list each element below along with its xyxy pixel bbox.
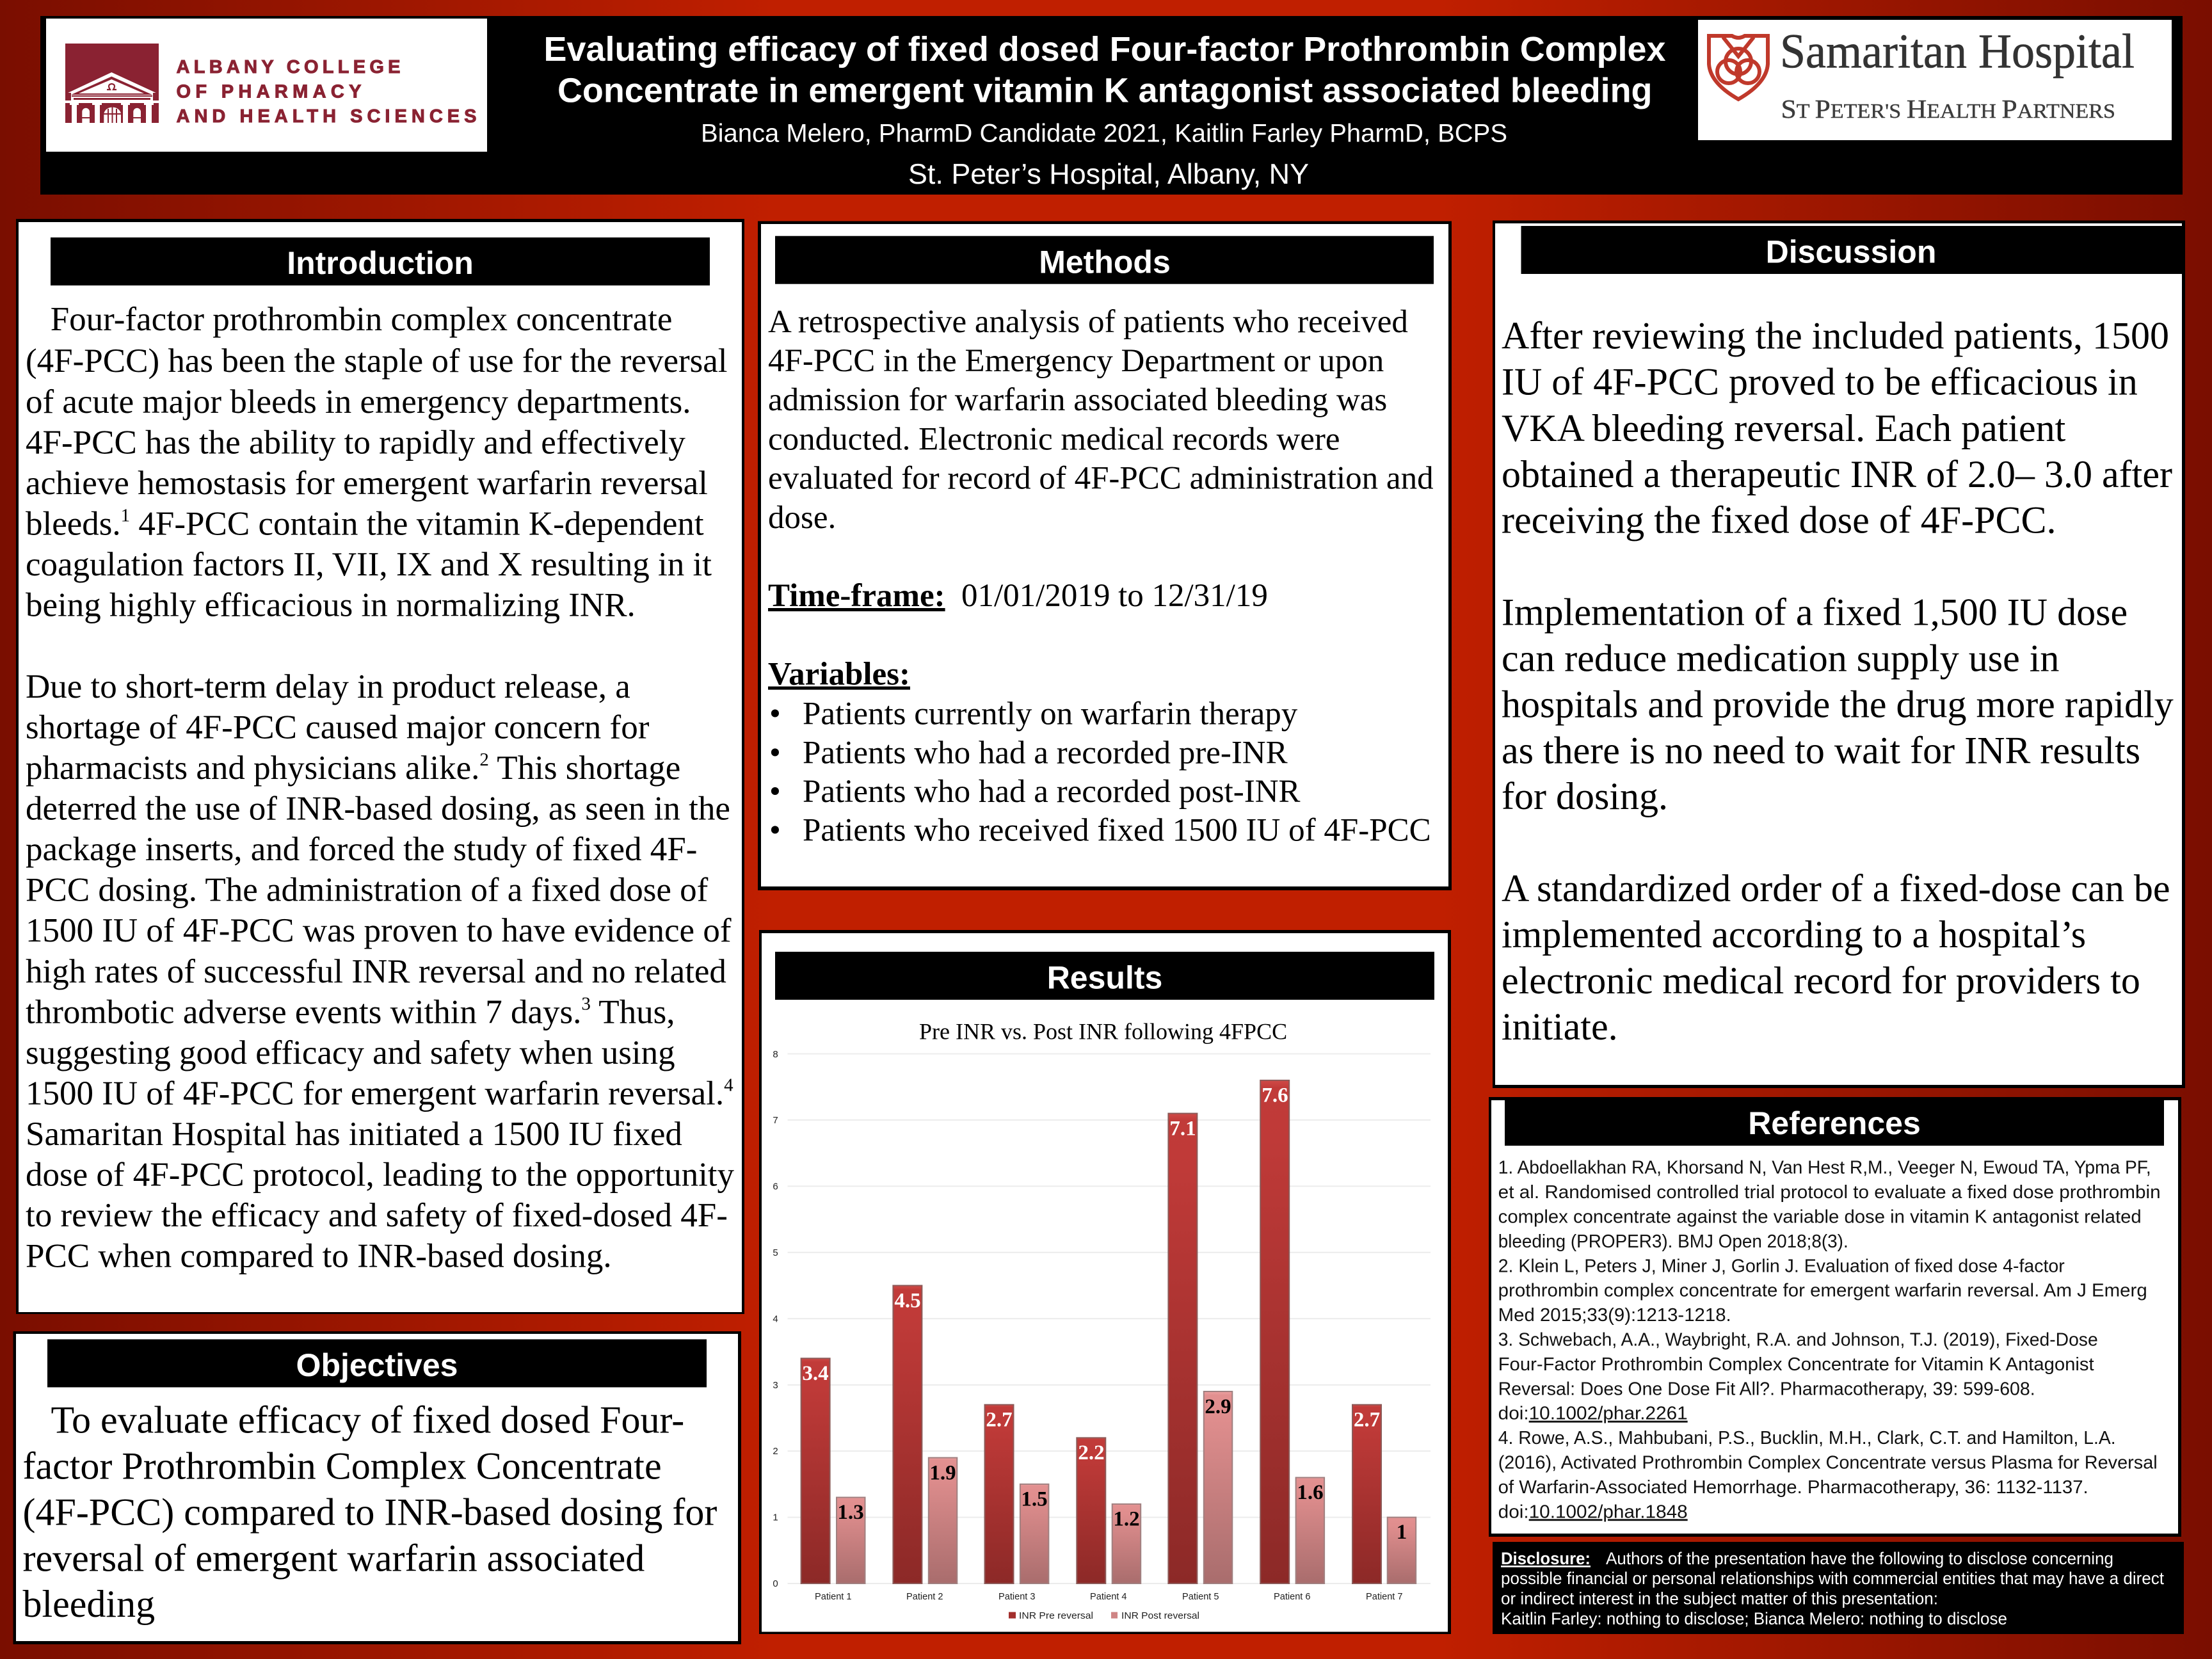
legend: INR Post reversal [1121,1610,1199,1621]
panel: disclosure [1493,1542,2184,1634]
icon: shield with interlocking rings [1709,36,1768,99]
title: Concentrate in emergent vitamin K antagonist associated bleeding [557,72,1653,110]
x axis labels: Patient 1 [815,1591,851,1602]
text: introduction body: deterred the use of INR-based dosing, as seen in the [26,790,730,828]
authors: Bianca Melero, PharmD Candidate 2021, Kaitlin Farley PharmD, BCPS [701,120,1507,148]
text: disclosure: Kaitlin Farley: nothing to disclose; Bianca Melero: nothing to disclose [1501,1609,2007,1628]
x axis labels: Patient 2 [906,1591,943,1602]
text: reference list: 3. Schwebach, A.A., Waybright, R.A. and Johnson, T.J. (2019), Fixed-Dose [1498,1330,2098,1350]
data labels: post reversal: 1.9 [929,1462,956,1485]
text: introduction body: high rates of successful INR reversal and no related [26,953,726,990]
bars: INR post reversal [837,1391,1416,1583]
y axis labels: 1 [773,1512,778,1523]
text: discussion body: VKA bleeding reversal. Each patient [1502,407,2066,449]
text: introduction body: (4F-PCC) has been the staple of use for the reversal [26,342,727,380]
chart title: Pre INR vs. Post INR following 4FPCC [919,1019,1287,1045]
text: introduction body: 1500 IU of 4F-PCC was proven to have evidence of [26,912,732,949]
text: discussion body: initiate. [1502,1006,1618,1048]
data labels: pre reversal: 2.7 [1354,1408,1380,1431]
data labels: pre reversal: 2.7 [986,1408,1013,1431]
text: discussion body: implemented according to a hospital’s [1502,913,2086,956]
text: discussion body: After reviewing the included patients, 1500 [1502,315,2169,357]
data labels: post reversal: 1 [1397,1521,1407,1544]
panel: references [1489,1097,2181,1537]
heading: Objectives [47,1339,707,1388]
text: introduction body: dose of 4F-PCC protocol, leading to the opportunity [26,1156,735,1193]
x axis labels: Patient 5 [1182,1591,1219,1602]
title: Evaluating efficacy of fixed dosed Four-factor Prothrombin Complex [544,30,1665,68]
text: reference list: doi:10.1002/phar.1848 [1498,1502,1688,1522]
text: introduction body: achieve hemostasis for emergent warfarin reversal [26,465,708,502]
text: variables list: Variables: [768,657,910,693]
text: objectives body: factor Prothrombin Complex Concentrate [23,1445,662,1487]
text: introduction body: Four-factor prothrombin complex concentrate [51,301,672,338]
text: variables list: • [769,813,781,849]
heading: References: References [1748,1105,1921,1141]
logo: Albany College of Pharmacy and Health Sciences: OF PHARMACY [177,82,361,102]
y axis labels: 3 [773,1380,778,1391]
x axis labels: Patient 6 [1274,1591,1311,1602]
heading: Introduction: Introduction [287,245,474,281]
text: variables list: • [769,696,781,732]
text: discussion body: can reduce medication supply use in [1502,637,2059,680]
text: variables list: Patients who had a recorded post-INR [803,774,1301,810]
text: disclosure: Disclosure: [1501,1549,1591,1568]
text: methods description: dose. [768,500,836,536]
y axis labels [773,1049,778,1589]
text: time-frame: 01/01/2019 to 12/31/19 [961,578,1268,614]
y axis labels: 0 [773,1578,778,1589]
logo: Albany College of Pharmacy and Health Sciences: ALBANY COLLEGE [177,57,401,77]
logo: Samaritan Hospital: ST PETER'S HEALTH PARTNERS [1781,94,2115,124]
text: introduction body: This shortage [489,749,680,787]
text: variables list: Patients who received fixed 1500 IU of 4F-PCC [803,813,1431,849]
text: introduction body: of acute major bleeds in emergency departments. [26,383,691,421]
text: introduction body: 1 [121,506,130,526]
x axis labels [815,1591,1403,1602]
text: objectives body: (4F-PCC) compared to INR-based dosing for [23,1491,717,1534]
data labels: pre reversal [802,1084,1380,1464]
data labels: pre reversal: 3.4 [802,1362,829,1385]
text: introduction body: to review the efficacy and safety of fixed-dosed 4F- [26,1197,728,1234]
text: reference list: complex concentrate against the variable dose in vitamin K antagonist related [1498,1207,2142,1228]
text: objectives body: reversal of emergent warfarin associated [23,1537,645,1580]
heading: Introduction [51,237,710,285]
data labels: post reversal: 1.2 [1113,1508,1140,1531]
data labels: post reversal: 1.3 [837,1501,864,1524]
text: methods description: conducted. Electronic medical records were [768,421,1340,457]
data labels: post reversal [837,1395,1407,1544]
heading: Results [775,952,1434,1000]
text: reference list: 1. Abdoellakhan RA, Khorsand N, Van Hest R,M., Veeger N, Ewoud TA, Ypma PF, [1498,1158,2151,1178]
text: reference list: Reversal: Does One Dose Fit All?. Pharmacotherapy, 39: 599-608. [1498,1379,2035,1399]
text: objectives body: To evaluate efficacy of fixed dosed Four- [51,1399,684,1441]
text: disclosure: possible financial or personal relationships with commercial entities that may have a direct [1501,1569,2165,1588]
text: introduction body: being highly efficacious in normalizing INR. [26,586,636,623]
text: reference list: Med 2015;33(9):1213-1218. [1498,1305,1731,1326]
data labels: pre reversal: 7.6 [1262,1084,1288,1107]
text: variables list: • [769,774,781,810]
text: objectives body: bleeding [23,1583,155,1625]
text: introduction body: shortage of 4F-PCC caused major concern for [26,709,650,746]
text: reference list [1498,1158,2161,1522]
affiliation: St. Peter’s Hospital, Albany, NY [908,159,1309,190]
heading: Objectives: Objectives [296,1347,458,1383]
panel: methods [758,221,1452,890]
bars: INR pre reversal [801,1080,1381,1583]
title [544,30,1665,110]
text: disclosure: or indirect interest in the subject matter of this presentation: [1501,1589,1938,1608]
text: discussion body: IU of 4F-PCC proved to be efficacious in [1502,361,2138,403]
x axis labels: Patient 4 [1090,1591,1126,1602]
text: introduction body: Samaritan Hospital has initiated a 1500 IU fixed [26,1116,682,1153]
text: reference list: bleeding (PROPER3). BMJ Open 2018;8(3). [1498,1231,1848,1252]
text: methods description: A retrospective analysis of patients who received [768,304,1408,340]
text: introduction body: PCC when compared to INR-based dosing. [26,1238,612,1275]
text: variables list: Patients who had a recorded pre-INR [803,735,1288,771]
text: discussion body: Implementation of a fixed 1,500 IU dose [1502,591,2128,634]
text: variables list: • [769,735,781,771]
text: discussion body: receiving the fixed dose of 4F-PCC. [1502,499,2056,541]
text: discussion body: hospitals and provide the drug more rapidly [1502,684,2174,726]
data labels: pre reversal: 7.1 [1169,1118,1196,1141]
text: methods description: evaluated for record of 4F-PCC administration and [768,461,1434,497]
text: introduction body: 4F-PCC contain the vitamin K-dependent [130,506,704,543]
text: disclosure: Authors of the presentation have the following to disclose concerning [1606,1549,2113,1568]
x axis labels: Patient 3 [998,1591,1036,1602]
text: reference list: (2016), Activated Prothrombin Complex Concentrate versus Plasma for Reversal [1498,1453,2158,1473]
text: reference list: Four-Factor Prothrombin Complex Concentrate for Vitamin K Antagonist [1498,1354,2094,1375]
panel: results [759,930,1451,1634]
y axis labels: 8 [773,1049,778,1060]
text: introduction body: bleeds. [26,506,704,543]
heading: Discussion [1521,226,2182,274]
text: introduction body: Thus, [591,993,675,1030]
text: reference list: prothrombin complex concentrate for emergent warfarin reversal. Am J Emerg [1498,1281,2147,1301]
text: introduction body: 4F-PCC has the ability to rapidly and effectively [26,424,685,461]
text: reference list: doi:10.1002/phar.2261 [1498,1404,1688,1424]
heading: Methods: Methods [1039,244,1171,280]
text: variables list: Patients currently on warfarin therapy [803,696,1298,732]
legend: INR Pre reversal [1019,1610,1093,1621]
text: introduction body: 4 [724,1075,733,1095]
panel: objectives [13,1331,741,1644]
text: methods description: 4F-PCC in the Emergency Department or upon [768,343,1384,379]
text: reference list: 2. Klein L, Peters J, Miner J, Gorlin J. Evaluation of fixed dose 4-factor [1498,1256,2065,1276]
legend [1009,1610,1199,1621]
heading: Discussion: Discussion [1766,234,1936,270]
header banner [40,16,2183,195]
data labels: post reversal: 1.6 [1297,1481,1324,1504]
heading: Methods [775,236,1434,284]
text: disclosure [1501,1549,2165,1628]
data labels: post reversal: 2.9 [1205,1395,1231,1418]
heading: References [1505,1100,2164,1146]
text: introduction body: suggesting good efficacy and safety when using [26,1034,675,1071]
text: discussion body: electronic medical record for providers to [1502,959,2140,1002]
text: introduction body: 3 [581,993,591,1014]
text: introduction body: coagulation factors II, VII, IX and X resulting in it [26,546,712,583]
text: introduction body: 2 [479,749,489,770]
text: introduction body: package inserts, and forced the study of fixed 4F- [26,831,697,868]
logo: Albany College of Pharmacy and Health Sciences: AND HEALTH SCIENCES [177,106,476,127]
text: introduction body: Due to short-term delay in product release, a [26,668,630,705]
text: time-frame: Time-frame: [768,578,945,614]
text: introduction body: thrombotic adverse events within 7 days. [26,993,675,1030]
x axis labels: Patient 7 [1366,1591,1403,1602]
text: reference list: et al. Randomised controlled trial protocol to evaluate a fixed dose prothrombin [1498,1182,2161,1203]
y axis labels: 2 [773,1446,778,1457]
text: reference list: 4. Rowe, A.S., Mahbubani, P.S., Bucklin, M.H., Clark, C.T. and Hamilton, L.A. [1498,1428,2116,1448]
y axis labels: 4 [773,1313,778,1325]
text: discussion body: for dosing. [1502,775,1668,817]
text: introduction body: 1500 IU of 4F-PCC for emergent warfarin reversal. [26,1075,733,1112]
logo: Samaritan Hospital: Samaritan Hospital [1780,25,2135,79]
text: discussion body: obtained a therapeutic INR of 2.0– 3.0 after [1502,453,2172,495]
logo: Albany College of Pharmacy and Health Sciences [46,19,487,152]
y axis labels: 7 [773,1115,778,1126]
data labels: pre reversal: 2.2 [1078,1441,1105,1464]
text: discussion body: as there is no need to wait for INR results [1502,730,2140,772]
text: methods description: admission for warfarin associated bleeding was [768,382,1387,418]
bar chart: pre vs post INR [773,1019,1431,1621]
text: reference list: of Warfarin-Associated Hemorrhage. Pharmacotherapy, 36: 1132-1137. [1498,1477,2088,1498]
y axis labels: 6 [773,1182,778,1192]
logo: Samaritan Hospital [1698,20,2172,140]
text: discussion body: A standardized order of a fixed-dose can be [1502,867,2170,910]
text: introduction body: PCC dosing. The administration of a fixed dose of [26,872,709,909]
panel: introduction [16,219,744,1314]
data labels: pre reversal: 4.5 [894,1289,921,1312]
panel: discussion [1493,220,2185,1088]
y axis labels: 5 [773,1247,778,1258]
text: introduction body: pharmacists and physicians alike. [26,749,680,787]
heading: Results: Results [1047,960,1162,996]
data labels: post reversal: 1.5 [1021,1487,1048,1511]
